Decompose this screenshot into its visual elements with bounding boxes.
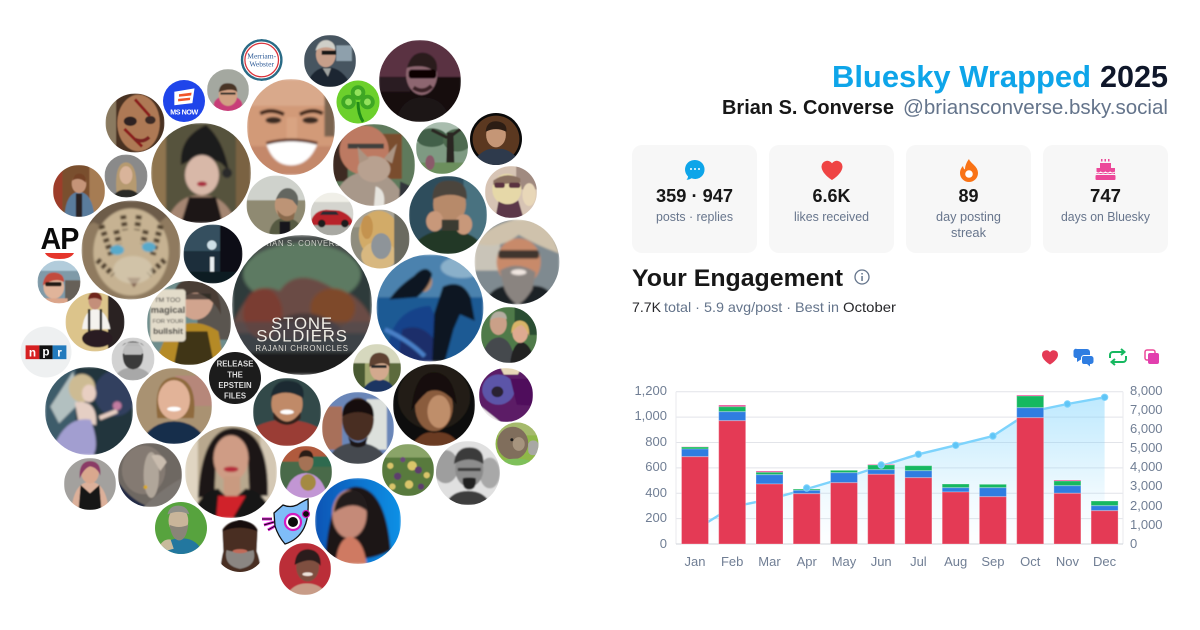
month labels: Feb [721, 554, 743, 569]
right axis labels: 1,000 [1130, 517, 1163, 532]
avatar: Release the Epstein Files [209, 352, 261, 404]
panel: posts and replies stat: 359 · 947 [656, 186, 733, 206]
month labels: Aug [944, 554, 967, 569]
avatar: cowboy hat bearded man [474, 220, 560, 304]
avatar: couple at an event [481, 307, 537, 363]
streak label [936, 209, 1001, 240]
right axis labels [1130, 383, 1163, 551]
avatar: Release the Epstein Files: RELEASE [217, 360, 253, 369]
avatar: smiling woman with navy shirt [136, 368, 212, 444]
left axis labels: 600 [645, 459, 667, 474]
icon: cake [1096, 159, 1116, 180]
avatar: Stone Soldiers book cover: BRIAN S. CONVERSE [257, 239, 347, 248]
avatar: green clover [336, 80, 380, 124]
month labels: Jan [685, 554, 705, 569]
month labels: Apr [797, 554, 817, 569]
bar: Jun [868, 464, 895, 544]
avatar: woman holding magical sign: I'M TOO [156, 297, 180, 304]
avatar: blonde woman on grey [104, 154, 148, 198]
avatar: woman holding magical sign: bullshit [153, 326, 183, 336]
avatar: yellow dog with toy [350, 210, 410, 270]
left axis labels: 1,000 [634, 408, 667, 423]
avatar: Release the Epstein Files: THE [227, 370, 243, 379]
right axis labels: 6,000 [1130, 421, 1163, 436]
panel: days on Bluesky stat: 747 [1090, 186, 1121, 206]
month labels: May [832, 554, 857, 569]
avatar: red sports car [310, 192, 354, 236]
panel: posting streak stat [906, 145, 1031, 253]
avatar: NPR logo: n [29, 347, 36, 360]
right axis labels: 0 [1130, 536, 1137, 551]
avatar: bearded man cut-out [220, 520, 260, 572]
bar: Feb [719, 405, 746, 544]
right axis labels: 4,000 [1130, 459, 1163, 474]
left axis labels: 800 [645, 434, 667, 449]
bar: Sep [979, 484, 1006, 544]
month labels: Oct [1020, 554, 1041, 569]
right axis labels: 5,000 [1130, 440, 1163, 455]
bar: Jul [905, 466, 932, 544]
avatar: man in pink shirt [207, 69, 249, 114]
avatar: man in red hoodie [253, 378, 321, 446]
month labels: Jun [871, 554, 892, 569]
avatar: bearded man at beach [246, 176, 306, 234]
left axis labels: 200 [645, 510, 667, 525]
panel: posts and replies stat [632, 145, 757, 253]
panel: days on Bluesky stat: days on Bluesky [1061, 209, 1150, 224]
avatar: man holding a cat [333, 124, 415, 206]
bar: May [830, 470, 858, 544]
title: 2025 [1100, 59, 1168, 94]
legend icons [1042, 349, 1159, 366]
left axis labels: 400 [645, 485, 667, 500]
avatar: woman holding magical sign [147, 278, 231, 365]
cumulative line [695, 397, 1105, 530]
left axis labels [634, 383, 667, 551]
chart: monthly engagement stacked bars with cumulative line [634, 383, 1163, 569]
profile name and handle [722, 97, 1168, 119]
engagement summary [632, 299, 896, 315]
avatar: MS NOW logo: MS NOW [170, 108, 198, 116]
avatar: moon over water [184, 224, 242, 284]
panel: posting streak stat: 89 [958, 186, 979, 206]
avatar: woman in white shirt, yellow wall [66, 292, 124, 352]
avatar: man in dark shirt with black border [470, 113, 522, 165]
avatar: bearded man black and white [112, 338, 154, 380]
avatar: blue mascot creature with pink tendrils [262, 499, 310, 544]
engagement summary: total · 5.9 avg/post · Best in [664, 299, 839, 315]
cumulative area [695, 397, 1105, 544]
chart grid [676, 392, 1123, 544]
avatar: fairy with lilac dress [45, 367, 137, 455]
icon: info [855, 270, 869, 284]
profile name and handle: @briansconverse.bsky.social [903, 97, 1168, 119]
avatar: woman on blue gradient [315, 478, 401, 564]
left axis labels: 1,200 [634, 383, 667, 398]
avatar: MS NOW logo [163, 80, 205, 122]
panel: likes stat: likes received [794, 209, 869, 224]
avatar: leopard [82, 200, 180, 300]
stacked bars [682, 395, 1118, 544]
avatar: dark pink tinted man [379, 40, 461, 122]
bar: Aug [942, 484, 969, 544]
avatar: woman with sunglasses and red hair at shore [38, 260, 80, 304]
profile name and handle: Brian S. Converse [722, 97, 894, 119]
icon: legend repost [1110, 349, 1126, 365]
bar: Oct [1017, 395, 1044, 544]
engagement summary: October [843, 299, 896, 315]
right axis labels: 7,000 [1130, 402, 1163, 417]
right axis labels: 2,000 [1130, 498, 1163, 513]
avatar: illustrated wombat [496, 422, 538, 467]
panel: likes stat: 6.6K [812, 186, 850, 206]
avatar: woman in black studded hat [151, 123, 251, 223]
bar: Apr [793, 489, 820, 544]
avatar: woman in denim jacket [53, 165, 105, 217]
month labels: Jul [910, 554, 927, 569]
avatar bubble cluster [20, 35, 560, 595]
icon: legend like [1042, 350, 1058, 364]
avatar: Merriam-Webster logo: Webster [249, 60, 274, 69]
avatar: Stone Soldiers book cover: SOLDIERS [256, 326, 348, 345]
line points [915, 394, 1108, 457]
avatar: Stone Soldiers book cover: STONE [271, 314, 333, 333]
avatar: man in black and white suit [433, 441, 500, 505]
avatar: grey cat sleeping [118, 443, 182, 507]
avatar: AP logo: AP [40, 221, 79, 256]
panel: days on Bluesky stat [1043, 145, 1168, 253]
avatar: man selfie with hoodie outdoors [322, 392, 394, 464]
month labels: Nov [1056, 554, 1079, 569]
avatar: woman on red background [279, 543, 331, 595]
icon: legend quote [1145, 350, 1159, 364]
avatar: Release the Epstein Files: FILES [224, 391, 246, 400]
bar: Nov [1054, 480, 1081, 544]
icon: chat bubble [685, 160, 705, 180]
avatar: Merriam-Webster logo: Merriam- [247, 51, 277, 60]
left axis labels: 0 [660, 536, 667, 551]
avatar: woman holding magical sign: FOR YOUR [153, 319, 183, 325]
avatar: smiling man cut-out [247, 79, 335, 175]
month labels: Sep [981, 554, 1004, 569]
bar: Jan [682, 447, 708, 544]
avatar: Release the Epstein Files: EPSTEIN [218, 381, 252, 390]
icon: heart [822, 161, 842, 180]
month labels [685, 554, 1117, 569]
bar: Mar [756, 471, 783, 544]
avatar: woman in black dress, pink hair [64, 458, 116, 510]
avatar: NPR logo [20, 326, 72, 378]
right axis labels: 3,000 [1130, 478, 1163, 493]
avatar: woman with glasses in front of foliage [353, 344, 401, 392]
avatar: purple tinted dog [479, 368, 533, 422]
bar: Dec [1091, 501, 1118, 544]
streak label: day posting [936, 209, 1001, 224]
streak label: streak [951, 225, 986, 240]
avatar: man with coconut [280, 446, 332, 498]
avatar: tulip flower garden [382, 444, 434, 496]
engagement summary: 7.7K [632, 299, 662, 315]
avatar: Merriam-Webster logo [241, 39, 283, 81]
panel: likes stat [769, 145, 894, 253]
avatar: Stone Soldiers book cover [232, 235, 372, 375]
avatar: zombie makeup face [106, 94, 164, 152]
avatar: woman holding magical sign: magical [151, 305, 185, 315]
avatar: Stone Soldiers book cover: RAJANI CHRONICLES [255, 344, 349, 353]
panel: posts and replies stat: posts · replies [656, 209, 733, 224]
avatar: woman in blue gown with black horse [376, 254, 484, 362]
right axis labels: 8,000 [1130, 383, 1163, 398]
line points above bars [804, 462, 884, 491]
avatar: man in green sweater on teal [409, 176, 487, 254]
title: Bluesky Wrapped [832, 59, 1091, 94]
avatar: NPR logo: p [42, 346, 50, 359]
month labels: Dec [1093, 554, 1117, 569]
avatar: person under oak tree [416, 122, 472, 174]
avatar: NPR logo: r [57, 347, 62, 360]
avatar: illustrated bearded man on green [155, 502, 207, 554]
icon: flame [960, 159, 978, 182]
avatar: woman with dark hair in shadow [393, 364, 475, 446]
avatar: woman with curly black hair, red top [185, 426, 277, 518]
month labels: Mar [758, 554, 781, 569]
avatar: faded sunglasses man [485, 166, 537, 218]
avatar: man with sunglasses dark jacket [304, 35, 356, 87]
icon: legend reply [1073, 349, 1094, 366]
heading: Your Engagement: Your Engagement [632, 265, 843, 292]
